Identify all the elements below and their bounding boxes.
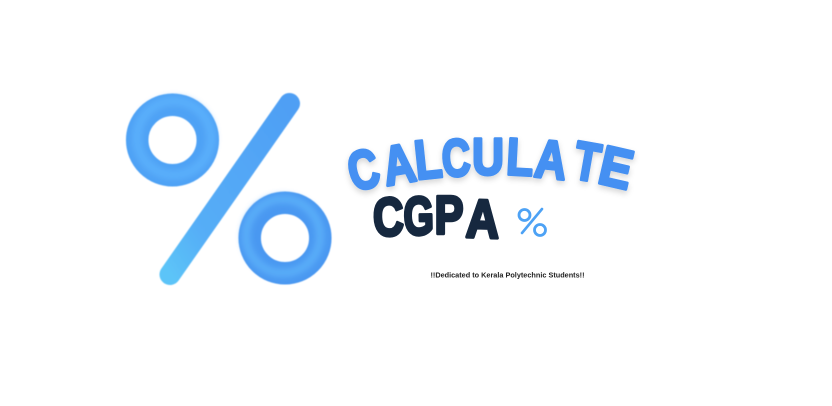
icon: large percent sign	[137, 101, 320, 274]
heading: CGPA: C	[372, 187, 405, 248]
icon: small percent sign	[519, 209, 546, 236]
heading: CALCULATE: C	[342, 137, 386, 204]
heading: CALCULATE: A	[532, 128, 570, 192]
heading: CGPA	[372, 185, 500, 250]
heading: CALCULATE: E	[594, 134, 639, 201]
tagline: !!Dedicated to Kerala Polytechnic Students!!	[430, 270, 585, 280]
heading: CALCULATE	[342, 127, 639, 204]
percent top ring	[137, 101, 211, 175]
heading: CALCULATE: L	[411, 127, 445, 191]
heading: CALCULATE: U	[472, 128, 504, 186]
heading: CALCULATE: T	[569, 130, 605, 194]
heading: CGPA: A	[465, 188, 500, 250]
percent bottom ring	[246, 199, 320, 273]
heading: CALCULATE: C	[440, 128, 472, 188]
heading: CALCULATE: A	[378, 131, 420, 198]
percent slash	[170, 104, 290, 274]
heading: CGPA: G	[403, 185, 434, 246]
heading: CALCULATE: L	[505, 128, 535, 188]
heading: CGPA: P	[435, 186, 463, 246]
